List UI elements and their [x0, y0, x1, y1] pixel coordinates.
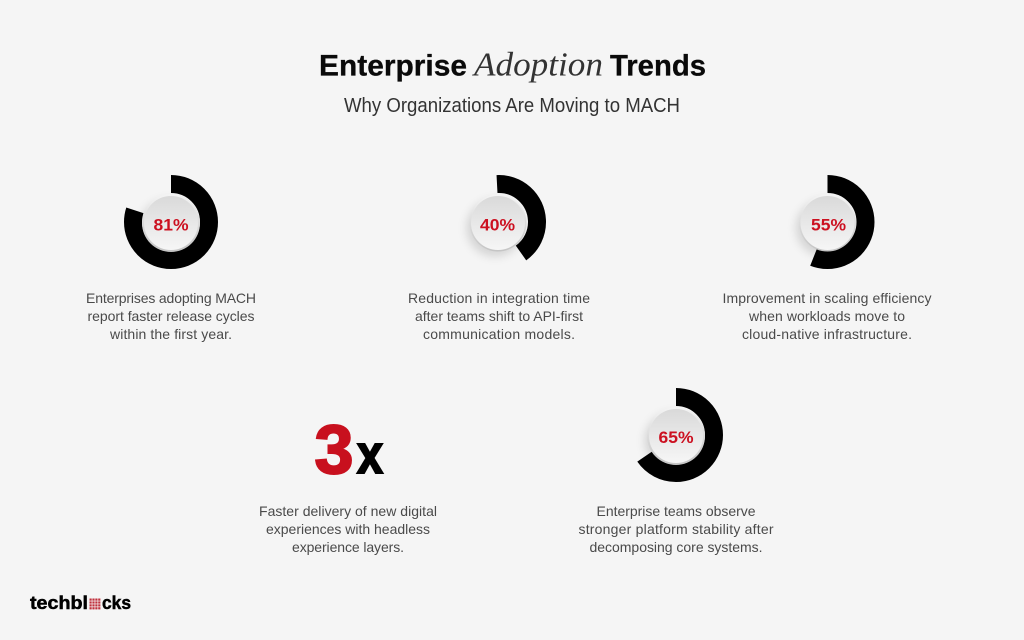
- description: 55%: Improvement in scaling efficiency: [722, 290, 932, 306]
- donut: 40%: 40%: [480, 216, 515, 234]
- description: 65%: stronger platform stability after: [578, 521, 774, 537]
- description: 65%: Enterprise teams observe: [596, 503, 756, 519]
- description: 3x: Faster delivery of new digital: [259, 503, 437, 519]
- description: 40%: [408, 290, 590, 342]
- description: 55%: when workloads move to: [748, 308, 905, 324]
- donut: 40%: [459, 182, 539, 262]
- subtitle: Why Organizations Are Moving to MACH: [344, 95, 680, 117]
- description: 81%: Enterprises adopting MACH: [86, 290, 256, 306]
- description: 55%: cloud-native infrastructure.: [742, 326, 912, 342]
- big number: 3x: 3: [314, 411, 354, 488]
- stat: 3x: [259, 411, 437, 555]
- stat: 65%: [578, 397, 774, 555]
- donut: 65%: 65%: [658, 429, 694, 447]
- logo: techblocks: [30, 592, 131, 613]
- description: 65%: decomposing core systems.: [590, 539, 762, 555]
- donut: 55%: 55%: [811, 216, 846, 234]
- title: Adoption: [472, 46, 603, 84]
- title: Enterprise: [319, 50, 467, 82]
- logo: techblocks: cks: [102, 592, 131, 613]
- stat: 81%: [86, 184, 256, 342]
- big number: 3x: x: [357, 423, 383, 485]
- big number: 3x: [314, 411, 383, 488]
- title: Trends: [610, 50, 706, 82]
- description: 81%: report faster release cycles: [88, 308, 254, 324]
- donut: 55%: [790, 184, 866, 260]
- description: 40%: Reduction in integration time: [408, 290, 590, 306]
- logo grid letter o: [90, 598, 100, 609]
- donut: 81%: 81%: [154, 216, 189, 234]
- stat: 40%: [408, 182, 590, 342]
- donut: 81%: [133, 184, 209, 260]
- description: 81%: [86, 290, 256, 342]
- logo: techblocks: techbl: [30, 592, 88, 613]
- description: 3x: [259, 503, 437, 555]
- description: 40%: communication models.: [423, 326, 575, 342]
- description: 3x: experiences with headless: [266, 521, 430, 537]
- stat: 55%: [722, 184, 932, 342]
- description: 40%: after teams shift to API-first: [415, 308, 583, 324]
- description: 3x: experience layers.: [292, 539, 404, 555]
- description: 55%: [722, 290, 932, 342]
- title: [319, 46, 706, 84]
- description: 81%: within the first year.: [109, 326, 232, 342]
- donut: 65%: [638, 397, 714, 473]
- description: 65%: [578, 503, 774, 555]
